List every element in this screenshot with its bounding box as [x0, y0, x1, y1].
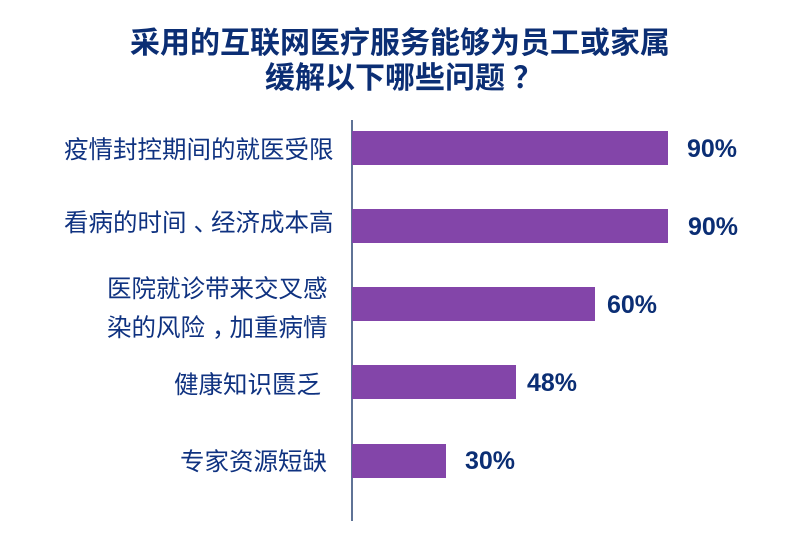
label: row 2: 看病的时间 、经济成本高 — [64, 204, 334, 239]
bar: row 4 — [352, 365, 516, 399]
label: row 1: 疫情封控期间的就医受限 — [64, 131, 334, 166]
value: row 1: 90% — [687, 135, 737, 163]
bar: row 5 — [352, 444, 446, 478]
title — [130, 18, 670, 97]
title: 采用的互联网医疗服务能够为员工或家属 — [130, 18, 670, 62]
label: row 3: 染的风险 ，加重病情 — [107, 309, 328, 344]
value: row 2: 90% — [688, 213, 738, 241]
value: row 3: 60% — [607, 291, 657, 319]
label: row 3: 医院就诊带来交叉感 — [107, 270, 328, 305]
label: row 3 — [107, 270, 328, 344]
title: 缓解以下哪些问题 ？ — [265, 53, 543, 97]
axis line — [351, 120, 353, 521]
label: row 4: 健康知识匮乏 — [174, 366, 321, 401]
bar: row 3 — [352, 287, 595, 321]
bar: row 2 — [352, 209, 668, 243]
value: row 4: 48% — [527, 369, 577, 397]
bar: row 1 — [352, 131, 668, 165]
label: row 5: 专家资源短缺 — [180, 443, 327, 478]
value: row 5: 30% — [465, 447, 515, 475]
